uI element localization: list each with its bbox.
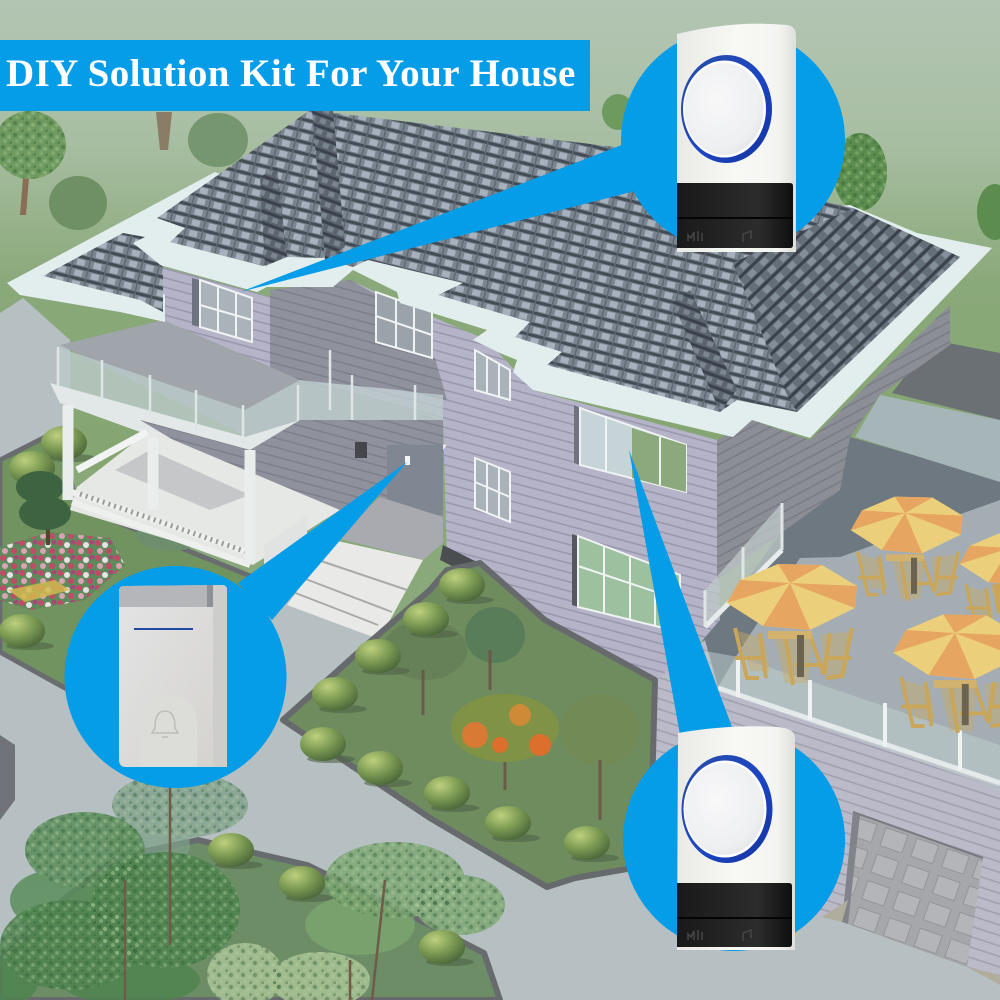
front porch	[68, 405, 443, 565]
callout circle: transmitter	[64, 566, 286, 788]
main house walls	[163, 267, 720, 695]
device: wireless button transmitter	[119, 585, 227, 767]
windows	[192, 278, 686, 632]
callout wedge: top receiver	[240, 138, 640, 292]
entrance steps	[287, 497, 477, 637]
background trees and shadows	[0, 94, 1000, 240]
callout circle: top receiver	[621, 28, 845, 252]
eaves	[7, 172, 992, 438]
upper balcony	[50, 320, 447, 470]
title	[0, 40, 590, 111]
foreground garden and trees	[0, 770, 505, 1000]
callout wedge: bottom receiver	[629, 450, 732, 735]
patio umbrellas and tables	[727, 497, 1000, 733]
callout circle: bottom receiver	[623, 729, 845, 951]
central garden bed	[283, 563, 655, 887]
patio floor	[703, 340, 1000, 790]
side railing	[705, 503, 782, 627]
lower wall of terrace	[650, 640, 1000, 985]
garage door	[820, 812, 1000, 1000]
pavement upper left	[0, 298, 70, 470]
callout wedge: transmitter	[238, 462, 407, 620]
terrace glass railing	[700, 650, 1000, 790]
pavement road	[0, 590, 1000, 1000]
left garden bed	[0, 426, 260, 688]
device: receiver top	[677, 24, 796, 252]
roof tiles	[43, 110, 960, 412]
device: receiver bottom	[677, 726, 795, 950]
curb object left	[0, 735, 15, 820]
right wing wall	[717, 305, 950, 580]
background lawn	[0, 0, 1000, 470]
title: DIY Solution Kit For Your House	[6, 52, 576, 95]
